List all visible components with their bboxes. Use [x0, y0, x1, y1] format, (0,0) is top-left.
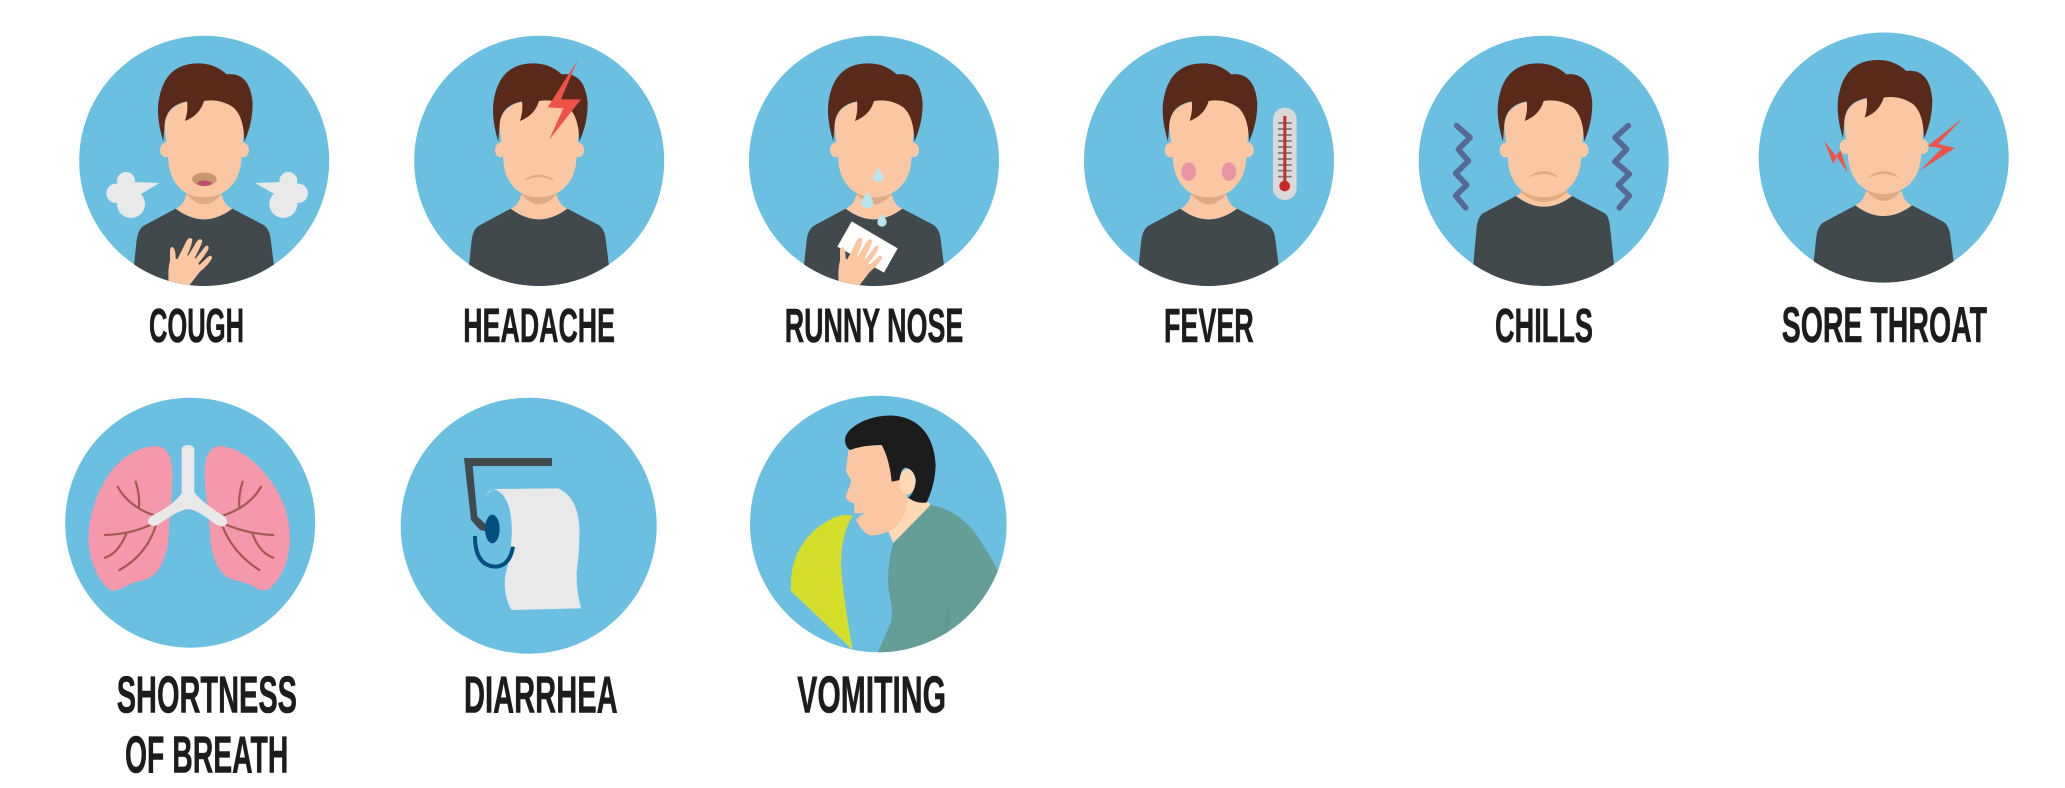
panel: diarrhea	[401, 398, 657, 723]
panel: sore throat	[1759, 32, 2009, 353]
icon: blue circle runny nose	[749, 36, 999, 286]
icon: blue circle diarrhea	[401, 398, 657, 654]
label: fever: FEVER	[1164, 300, 1254, 353]
icon: person with headache	[469, 60, 609, 290]
label: headache: HEADACHE	[463, 300, 615, 353]
label: cough: COUGH	[149, 300, 244, 353]
icon: shiver lines	[1456, 126, 1629, 208]
icon: blue circle sore throat	[1759, 32, 2009, 282]
icon: toilet paper roll	[464, 458, 581, 610]
panel: vomiting	[750, 396, 1007, 723]
label: shortness of breath: SHORTNESS	[117, 666, 297, 724]
icon: blue circle headache	[414, 36, 664, 286]
label: vomiting: VOMITING	[797, 665, 946, 723]
panel: shortness of breath	[65, 398, 315, 783]
icon: person with runny nose	[804, 63, 944, 290]
icon: person with sore throat	[1813, 60, 1954, 287]
label: shortness of breath	[117, 666, 297, 783]
icon: blue circle lungs	[65, 398, 315, 648]
label: diarrhea: DIARRHEA	[464, 665, 618, 723]
icon: person with fever	[1138, 63, 1279, 290]
icon: shivering person	[1473, 63, 1614, 290]
panel: headache	[414, 36, 664, 353]
icon: thermometer	[1273, 108, 1297, 200]
panel: chills	[1419, 36, 1669, 353]
icon: pain bolts	[1824, 118, 1963, 172]
panel: cough	[79, 36, 329, 353]
icon: blue circle chills	[1419, 36, 1669, 286]
icon: person coughing	[106, 63, 308, 290]
label: chills: CHILLS	[1495, 300, 1593, 353]
icon: lungs	[88, 445, 290, 591]
label: shortness of breath: OF BREATH	[125, 725, 288, 783]
panel: fever	[1084, 36, 1334, 353]
label: runny nose: RUNNY NOSE	[785, 300, 963, 353]
icon: blue circle vomiting	[750, 396, 1007, 652]
icon: blue circle fever	[1084, 36, 1334, 286]
panel: runny nose	[749, 36, 999, 353]
icon: person vomiting	[791, 416, 998, 655]
icon: blue circle cough	[79, 36, 329, 286]
